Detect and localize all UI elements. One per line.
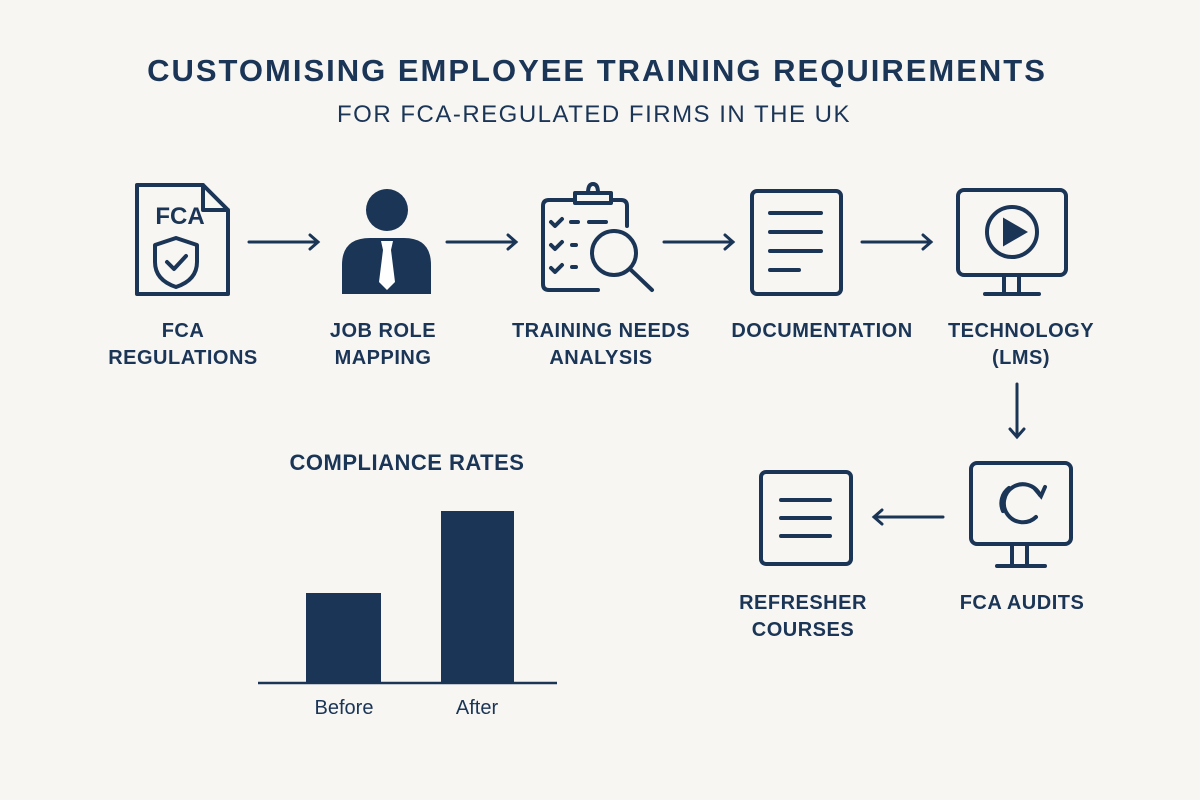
- icon: FCA document: FCA: [155, 203, 205, 230]
- label: FCA regulations: FCA: [162, 320, 204, 342]
- label: technology: TECHNOLOGY: [948, 320, 1094, 342]
- label: training needs analysis: TRAINING NEEDS: [512, 320, 690, 342]
- arrow 2: [447, 235, 516, 249]
- icon: person: [342, 189, 431, 294]
- label: job role mapping: MAPPING: [335, 347, 431, 369]
- icon: FCA audits monitor: [971, 463, 1071, 566]
- chart: compliance rates: COMPLIANCE RATES: [290, 450, 524, 475]
- label: technology: (LMS): [992, 347, 1050, 369]
- label: training needs analysis: ANALYSIS: [549, 347, 653, 369]
- label: job role mapping: JOB ROLE: [330, 320, 436, 342]
- chart: compliance rates: After: [456, 697, 498, 719]
- arrow down: [1010, 384, 1024, 437]
- icon: monitor play: [958, 190, 1066, 294]
- icon: clipboard with magnifier: [543, 184, 652, 290]
- arrow 1: [249, 235, 318, 249]
- label: FCA regulations: REGULATIONS: [108, 347, 258, 369]
- arrow left: [874, 510, 943, 524]
- icon: documentation: [752, 191, 841, 294]
- icon: refresher doc: [761, 472, 851, 564]
- label: FCA audits: FCA AUDITS: [960, 592, 1084, 614]
- arrow 4: [862, 235, 931, 249]
- title: CUSTOMISING EMPLOYEE TRAINING REQUIREMENTS: [147, 53, 1047, 88]
- icon: FCA document: [137, 185, 228, 294]
- label: documentation: DOCUMENTATION: [731, 320, 913, 342]
- label: refresher courses: REFRESHER: [739, 592, 867, 614]
- chart: compliance rates: Before: [315, 697, 373, 719]
- chart: compliance rates: [258, 450, 557, 719]
- subtitle: FOR FCA-REGULATED FIRMS IN THE UK: [337, 101, 851, 128]
- arrow 3: [664, 235, 733, 249]
- label: refresher courses: COURSES: [752, 619, 854, 641]
